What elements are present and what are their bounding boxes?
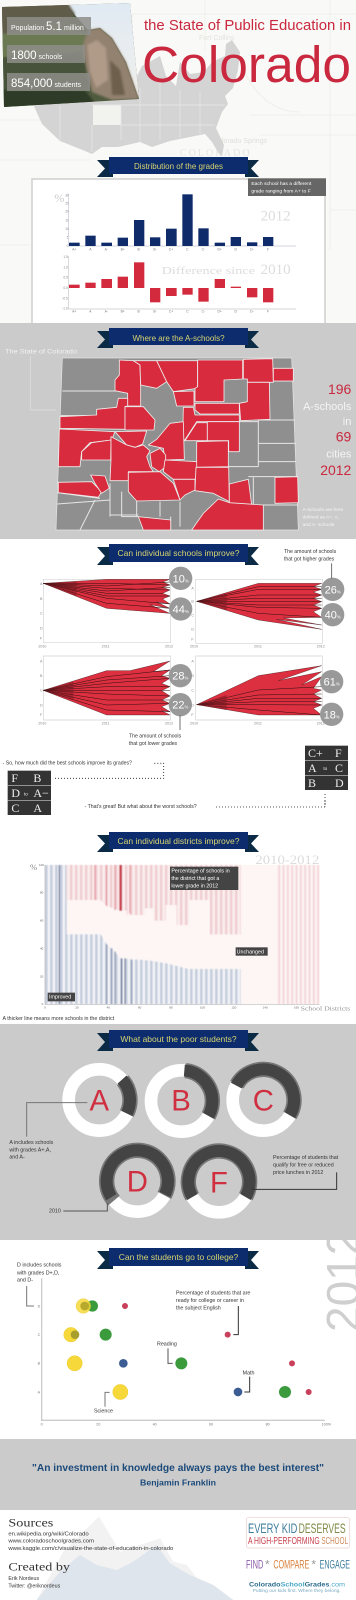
axes: 40	[107, 1005, 110, 1009]
chart: schools starting at A: 2010	[38, 644, 46, 648]
label: 2010	[49, 1203, 107, 1215]
donut: D	[94, 1138, 181, 1224]
note: D includes: and D-	[17, 1278, 33, 1284]
callout: lower grade: lower grade in 2012	[171, 883, 218, 889]
label: Reading: Reading	[157, 1341, 177, 1347]
callout: lower grade	[170, 867, 238, 890]
axes: 60	[209, 1423, 213, 1427]
chart: schools starting at D: C	[191, 689, 194, 693]
axes: D	[38, 1304, 41, 1308]
label: The State of Colorado: The State of Colorado	[5, 349, 78, 356]
bubbles: grade D	[76, 1299, 128, 1313]
chart: schools starting at A: F	[40, 636, 43, 640]
stat: 196 A-schools in 69 cities: cities	[326, 449, 352, 461]
heading banner: individual districts	[97, 832, 259, 852]
chart: schools starting at D: 2010	[190, 721, 198, 725]
logo: ColoradoSchoolGrades.com	[249, 1581, 345, 1593]
grade box: worst schools: B	[308, 776, 316, 790]
bar chart: 2012 grades: B-	[153, 247, 157, 251]
bar chart: 2012 grades: A	[89, 247, 92, 251]
label: school districts: School Districts	[301, 1006, 351, 1013]
background: faint road map: Colorado Springs	[213, 138, 268, 145]
note: A includes: A includes schools	[9, 1140, 54, 1146]
chart: schools starting at D	[190, 656, 325, 725]
grade box: best schools: D	[11, 786, 20, 800]
chart: schools starting at D: D	[191, 703, 194, 707]
note: A includes	[9, 1103, 87, 1161]
bar chart: difference since 2010: A+	[72, 309, 76, 313]
bar chart: 2012 grades: 5	[67, 235, 69, 239]
chart: schools starting at C: B	[40, 674, 43, 678]
note: D includes: D includes schools	[17, 1263, 62, 1269]
bar chart: 2012 grades: D+	[217, 247, 222, 251]
note: A-schools definition: and A- schools	[303, 522, 335, 528]
bar chart: 2012 grades: D	[234, 247, 237, 251]
note: higher grades: The amount of schools	[284, 549, 337, 555]
panel: where are the A-schools	[0, 323, 356, 539]
chart: schools starting at C: D	[40, 703, 43, 707]
axes: 160	[294, 1005, 299, 1009]
chart: schools starting at B: F	[191, 638, 194, 642]
bar chart: difference since 2010: -0.5	[62, 296, 68, 300]
chart: schools starting at B: 2010	[190, 644, 198, 648]
label: Science: Science	[94, 1408, 113, 1414]
donut: C: C	[253, 1084, 274, 1117]
bar chart: 2012 grades	[54, 191, 296, 251]
credits: Twitter: @eriknordeus	[8, 1583, 61, 1589]
chart: schools starting at D: A	[191, 659, 194, 663]
chart: college readiness bubbles	[17, 1263, 332, 1427]
percentage circles: 61%	[324, 677, 340, 689]
bar chart: 2012 grades: D-	[250, 247, 254, 251]
logo: find compare engage: *	[311, 1557, 316, 1571]
callout: improved: Improved	[49, 995, 71, 1001]
panel: quote: Benjamin Franklin	[140, 1478, 216, 1488]
grade box: best schools: A−	[33, 786, 49, 800]
axes: %	[30, 862, 37, 872]
grade box: worst schools: A	[308, 761, 317, 775]
callout: unchanged: Unchanged	[237, 949, 264, 955]
chart: schools starting at C	[38, 656, 173, 725]
stripes: improved schools	[45, 865, 241, 1004]
bar chart: difference since 2010: A	[89, 309, 92, 313]
grade box: best schools	[8, 771, 51, 815]
bar chart: difference since 2010: C+	[169, 309, 173, 313]
credits	[8, 1560, 70, 1589]
axes: 100	[39, 863, 44, 867]
callout: improved	[48, 993, 75, 1001]
donut: A: A	[90, 1084, 110, 1117]
bubbles: grade C	[64, 1327, 231, 1342]
logo: find compare engage	[246, 1557, 350, 1571]
bar chart: 2012 grades: 10	[65, 227, 69, 231]
bar chart: difference since 2010: D-	[250, 309, 254, 313]
heading banner: distribution	[97, 157, 259, 177]
stat: 196 A-schools in 69 cities: A-schools	[303, 401, 352, 413]
bar chart: difference since 2010: B	[138, 309, 141, 313]
question: best schools: - So, how much did the best schools improve its grades?	[3, 760, 132, 766]
stat: 196 A-schools in 69 cities	[303, 381, 352, 478]
bar chart: 2012 grades: F	[267, 247, 269, 251]
note: free lunch: qualify for free or reduced	[273, 1163, 334, 1169]
callout: lower grade: Percentage of schools in	[171, 869, 230, 875]
note: English	[176, 1290, 250, 1335]
bar chart: 2012 grades: 25	[65, 201, 69, 205]
callout: grade range: Each school has a different	[251, 181, 312, 187]
heading banner: poor students: What about the poor students?	[120, 1034, 237, 1044]
heading banner: individual districts: Can individual districts improve?	[118, 836, 240, 846]
axes: 60	[138, 1005, 142, 1009]
panel: quote	[0, 1439, 356, 1510]
bubbles: grade B	[67, 1356, 295, 1371]
sources	[8, 1515, 173, 1552]
logo: every kid deserves: EVERY KID	[248, 1520, 297, 1536]
axes	[38, 1278, 332, 1427]
axes: 0	[42, 1002, 44, 1006]
stat: population	[7, 17, 91, 35]
bar chart: difference since 2010: -1.0	[62, 307, 68, 311]
title: Colorado	[142, 36, 351, 93]
note: D includes: with grades D+,D,	[17, 1270, 59, 1276]
bar chart: difference since 2010: D+	[217, 309, 222, 313]
note: D includes	[17, 1263, 62, 1306]
bar chart: 2012 grades: B+	[121, 247, 125, 251]
chart: schools starting at A	[38, 579, 173, 648]
US map	[34, 40, 240, 156]
grade box: worst schools: C	[335, 761, 343, 775]
axes: 80	[169, 1005, 173, 1009]
bar chart: difference since 2010: Difference since	[162, 266, 255, 277]
percentage circles: 28%	[172, 671, 189, 683]
bar chart: difference since 2010: 1.0	[63, 265, 68, 269]
logo: find compare engage: *	[265, 1557, 270, 1571]
callout: grade range: grade ranging from A+ to F	[251, 188, 311, 194]
note: thicker line: A thicker line means more schools in the district	[2, 1016, 115, 1022]
percentage circles: 40%	[325, 610, 341, 622]
axes: 20	[96, 1423, 100, 1427]
chart: schools starting at C: 2011	[102, 721, 110, 725]
logo: find compare engage: FIND	[246, 1557, 264, 1571]
note: English: ready for college or career in	[176, 1298, 244, 1304]
label: Reading	[157, 1341, 177, 1363]
stat: schools	[7, 45, 85, 63]
percentage circles: 26%	[325, 584, 341, 596]
donut: F	[177, 1140, 261, 1224]
stripes: lower grade schools	[67, 865, 319, 1004]
logo: ColoradoSchoolGrades.com: Putting our kids first. Where they belong.	[253, 1588, 341, 1593]
bar chart: 2012 grades: C+	[169, 247, 173, 251]
section: individual schools charts	[3, 549, 348, 815]
label: Math: Math	[243, 1370, 255, 1376]
note: A includes: with grades A+,A,	[9, 1147, 51, 1153]
chart: schools starting at A: A	[40, 582, 43, 586]
credits: Created by	[8, 1560, 70, 1574]
heading banner: college	[97, 1248, 259, 1269]
axes	[30, 862, 319, 1009]
label: 2010: 2010	[49, 1209, 61, 1215]
bar chart: difference since 2010: D	[234, 309, 237, 313]
stat: students: 854,000 students	[11, 78, 81, 90]
stat: 196 A-schools in 69 cities: in	[343, 416, 351, 428]
axes: 0	[41, 1423, 43, 1427]
heading banner: where are the A-schools	[97, 328, 259, 348]
stat: population: Population 5.1 million	[11, 21, 84, 33]
bar chart: difference since 2010: 1.5	[63, 255, 68, 259]
bar chart: 2012 grades: C-	[202, 247, 205, 251]
donut: C	[221, 1058, 305, 1142]
sources: en.wikipedia.org/wiki/Colorado	[8, 1531, 89, 1537]
note: A includes: and A-	[9, 1155, 25, 1161]
logo: every kid deserves: A HIGH-PERFORMING	[248, 1536, 320, 1547]
chart: schools starting at A: D	[40, 626, 43, 630]
axes: C	[38, 1333, 41, 1337]
axes: 40	[153, 1423, 157, 1427]
note: A-schools definition: A-schools are here	[303, 507, 344, 513]
axes: 0	[44, 1005, 46, 1009]
chart: schools starting at C: F	[40, 713, 43, 717]
bar chart: 2012 grades: A-	[105, 247, 108, 251]
chart: districts stacked stripes	[30, 853, 351, 1013]
axes: 80	[266, 1423, 270, 1427]
donut: F: F	[210, 1166, 228, 1199]
bar chart: difference since 2010: F	[267, 309, 269, 313]
axes: 20	[75, 1005, 79, 1009]
chart: schools starting at B: 2012	[317, 644, 325, 648]
chart: schools starting at B: B	[191, 600, 194, 604]
chart: schools starting at C: C	[40, 689, 43, 693]
callout: lower grade: the district that got a	[171, 876, 219, 882]
note: higher grades	[284, 549, 337, 578]
panel: quote: "An investment in knowledge always pays the best interest"	[32, 1462, 324, 1474]
bar chart: difference since 2010: C	[186, 309, 189, 313]
callout: grade range	[248, 178, 326, 196]
label: 2010-2012: 2010-2012	[255, 853, 319, 867]
percentage circles: 18%	[324, 709, 340, 721]
background: faint road map: COLORADO	[180, 148, 252, 159]
note: A-schools definition	[303, 507, 344, 528]
panel: grade distribution	[32, 178, 326, 329]
bar chart: difference since 2010: 0.0	[63, 286, 68, 290]
bar chart: difference since 2010: C-	[202, 309, 205, 313]
stat: 196 A-schools in 69 cities: 69	[336, 429, 352, 445]
background: faint road map: Fort Collins	[199, 35, 235, 42]
axes: 140	[263, 1005, 268, 1009]
question: worst schools	[324, 794, 326, 807]
bar chart: 2012 grades: 20	[65, 210, 69, 214]
chart: schools starting at D: 2012	[317, 721, 325, 725]
chart: schools starting at C: A	[40, 659, 43, 663]
chart: schools starting at B: C	[191, 614, 194, 618]
map of Colorado	[56, 358, 298, 530]
logo: every kid deserves	[246, 1518, 350, 1548]
bar chart: difference since 2010: 2010	[261, 262, 291, 278]
note: English: Percentage of students that are	[176, 1290, 250, 1296]
grade box: worst schools	[305, 746, 348, 790]
grade box: worst schools: to	[323, 766, 328, 771]
note: lower grades	[129, 715, 182, 747]
credits: Erik Nordeus	[8, 1576, 39, 1582]
chart: schools starting at D: F	[191, 713, 194, 717]
note: English: the subject English	[176, 1305, 221, 1311]
stat: schools: 1800 schools	[11, 50, 63, 62]
note: higher grades: that got higher grades	[284, 557, 335, 563]
heading banner: individual schools	[97, 544, 259, 565]
chart: schools starting at B: 2011	[254, 644, 262, 648]
bar chart: difference since 2010	[62, 255, 296, 313]
bar chart: difference since 2010: 0.5	[63, 276, 68, 280]
sources: Sources	[8, 1515, 54, 1529]
bar chart: 2012 grades: 0	[67, 244, 69, 248]
bubbles: grade A	[113, 1384, 312, 1400]
logo: find compare engage: COMPARE	[273, 1557, 309, 1571]
chart: schools starting at B: D	[191, 628, 194, 632]
grade box: worst schools: C+	[308, 746, 323, 760]
bar chart: 2012 grades: %	[54, 191, 64, 205]
stat: 196 A-schools in 69 cities: 2012	[320, 462, 352, 478]
logo: ColoradoSchoolGrades.com: ColoradoSchoolGrades.com	[249, 1581, 345, 1588]
chart: schools starting at A: 2012	[165, 644, 173, 648]
heading banner: college: Can the students go to college?	[119, 1252, 239, 1262]
axes: 80	[40, 891, 44, 895]
chart: schools starting at B	[190, 579, 325, 648]
bar chart: 2012 grades: 15	[65, 218, 69, 222]
stat: students	[7, 73, 90, 91]
panel: poor students	[0, 1024, 356, 1240]
bar chart: 2012 grades: C	[186, 247, 189, 251]
chart: schools starting at C: 2012	[165, 721, 173, 725]
note: free lunch: price lunches in 2012	[273, 1170, 323, 1176]
chart: schools starting at A: C	[40, 612, 43, 616]
question text: worst schools	[84, 800, 325, 810]
bar chart: 2012 grades: 30	[65, 193, 69, 197]
axes: 100%	[322, 1423, 332, 1427]
heading banner: individual schools: Can individual schools improve?	[118, 548, 240, 558]
sources: www.kaggle.com/c/visualize-the-state-of-education-in-colorado	[8, 1546, 173, 1552]
note: lower grades: that got lower grades	[129, 741, 178, 747]
label: Math	[243, 1370, 255, 1392]
bar chart: difference since 2010: A-	[105, 309, 108, 313]
grade box: best schools: to	[24, 792, 28, 797]
grade box: worst schools: F	[335, 746, 342, 760]
chart: schools starting at D: B	[191, 674, 194, 678]
chart: schools starting at B: A	[191, 586, 194, 590]
callout: unchanged	[236, 947, 268, 956]
bar chart: 2012 grades: B	[138, 247, 141, 251]
mountain illustration	[37, 1517, 233, 1600]
note: lower grades: The amount of schools	[129, 733, 182, 739]
grade box: worst schools: D	[335, 776, 344, 790]
background: faint road map	[0, 0, 356, 323]
chart: schools starting at A: B	[40, 597, 43, 601]
note: A-schools definition: defined as A+, A,	[303, 515, 339, 521]
donut: B	[147, 1067, 216, 1135]
chart: schools starting at D: 2011	[254, 721, 262, 725]
question: best schools	[3, 760, 164, 778]
axes: A	[38, 1390, 41, 1394]
question text: worst schools: - That's great! But what about the worst schools?	[84, 804, 197, 810]
heading banner: where are the A-schools: Where are the A-schools?	[132, 334, 225, 343]
donut: D: D	[127, 1166, 148, 1199]
percentage circles: 44%	[173, 604, 189, 616]
heading banner: distribution: Distribution of the grades	[134, 162, 223, 171]
title: the State of Public Education in	[144, 17, 351, 34]
grade box: best schools: A	[33, 801, 42, 815]
note: free lunch	[252, 1155, 339, 1189]
axes: B	[38, 1362, 41, 1366]
stat: 196 A-schools in 69 cities: 196	[328, 381, 352, 397]
axes: 100	[200, 1005, 205, 1009]
photo: Colorado mountain cliff	[0, 0, 140, 110]
percentage circles: 22%	[172, 700, 189, 712]
chart: schools starting at A: 2011	[102, 644, 110, 648]
axes: 60	[40, 919, 44, 923]
heading banner: poor students	[97, 1030, 259, 1051]
bar chart: difference since 2010: B+	[121, 309, 125, 313]
axes: 20	[40, 974, 44, 978]
bar chart: 2012 grades: A+	[72, 247, 76, 251]
donut: A	[56, 1057, 143, 1143]
bar chart: difference since 2010: B-	[153, 309, 157, 313]
label: The State of Colorado	[5, 349, 78, 410]
bar chart: 2012 grades: 2012	[261, 209, 291, 225]
footer	[8, 1515, 350, 1600]
label: Science	[94, 1392, 113, 1414]
axes: 120	[231, 1005, 237, 1009]
percentage circles	[169, 567, 344, 726]
axes: 40	[40, 946, 44, 950]
grade box: best schools: B	[33, 771, 41, 785]
sources: www.coloradoschoolgrades.com	[8, 1539, 95, 1545]
grade box: best schools: F	[11, 771, 18, 785]
note: free lunch: Percentage of students that	[273, 1155, 339, 1161]
grade box: best schools: C	[11, 801, 19, 815]
chart: schools starting at C: 2010	[38, 721, 46, 725]
donut: B: B	[171, 1084, 191, 1117]
percentage circles: 10%	[173, 573, 189, 585]
